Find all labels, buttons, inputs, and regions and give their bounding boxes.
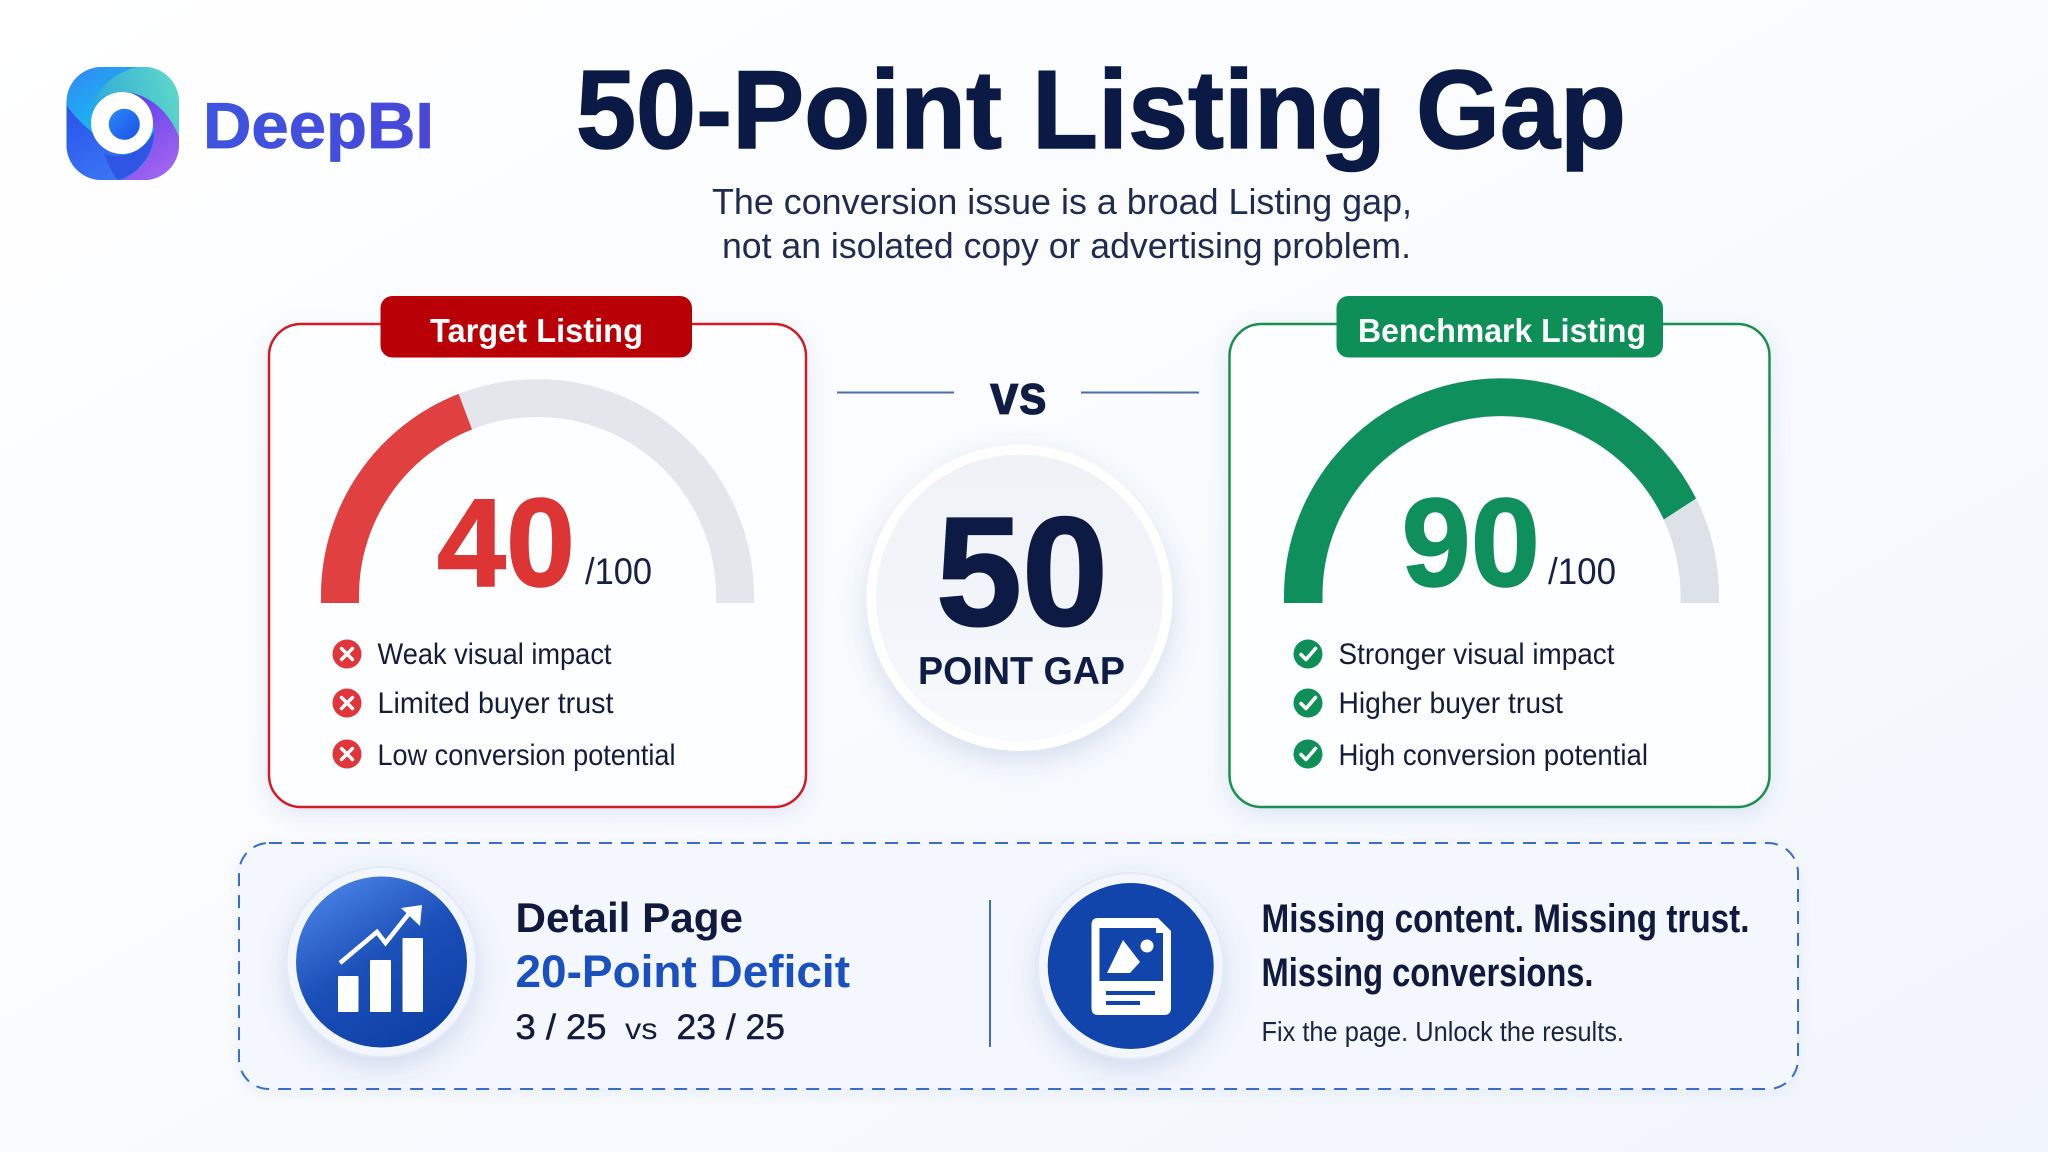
title: 50-Point Listing Gap	[576, 48, 1626, 172]
text: detail page deficit: vs	[625, 1013, 658, 1046]
subtitle: The conversion issue is a broad Listing gap,	[712, 181, 1412, 222]
icon: chart with rising arrow	[286, 867, 476, 1057]
gauge: score 90	[1284, 378, 1719, 613]
item: limited buyer trust: Limited buyer trust	[378, 687, 614, 720]
label point gap: POINT GAP	[918, 650, 1125, 693]
item: stronger visual impact: Stronger visual impact	[1338, 638, 1615, 671]
badge: 50 point gap	[866, 445, 1172, 751]
score value: 90	[1402, 474, 1540, 613]
wordmark: DeepBI	[203, 89, 434, 162]
panel: bottom summary	[239, 843, 1798, 1089]
text: detail page deficit: 23 / 25	[676, 1008, 785, 1047]
panel: target listing	[269, 296, 806, 807]
score scale: /100	[1548, 551, 1616, 592]
logo: DeepBI	[60, 60, 434, 182]
item: higher buyer trust: Higher buyer trust	[1338, 687, 1564, 720]
item: low conversion potential: Low conversion potential	[378, 739, 676, 772]
subtitle: not an isolated copy or advertising problem.	[722, 225, 1411, 266]
panel: benchmark listing	[1230, 296, 1770, 807]
item: high conversion potential: High conversion potential	[1338, 739, 1648, 772]
vs divider: vs	[990, 363, 1047, 427]
tag: benchmark listing: Benchmark Listing	[1358, 312, 1646, 349]
score value: 40	[437, 474, 575, 613]
icon: document with image	[1038, 873, 1224, 1059]
list: strengths	[1294, 638, 1648, 772]
text: detail page deficit: 20-Point Deficit	[516, 946, 850, 997]
icon: DeepBI swirl mark	[66, 67, 179, 180]
text: missing content message: Missing content. Missing trust.	[1262, 897, 1750, 941]
value 50: 50	[936, 485, 1108, 658]
tag: target listing	[380, 296, 692, 358]
text: detail page deficit	[516, 894, 850, 1047]
tag: target listing: Target Listing	[430, 312, 643, 349]
tag: benchmark listing	[1336, 296, 1663, 358]
text: missing content message: Fix the page. Unlock the results.	[1262, 1016, 1624, 1047]
gauge: score 40	[321, 379, 754, 613]
subtitle	[712, 181, 1412, 266]
text: missing content message: Missing conversions.	[1262, 951, 1594, 995]
text: detail page deficit: 3 / 25	[516, 1008, 606, 1047]
list: weaknesses	[332, 638, 676, 772]
item: weak visual impact: Weak visual impact	[378, 638, 612, 671]
text: missing content message	[1262, 897, 1750, 1047]
text: detail page deficit: Detail Page	[516, 894, 743, 941]
score scale: /100	[585, 551, 652, 592]
